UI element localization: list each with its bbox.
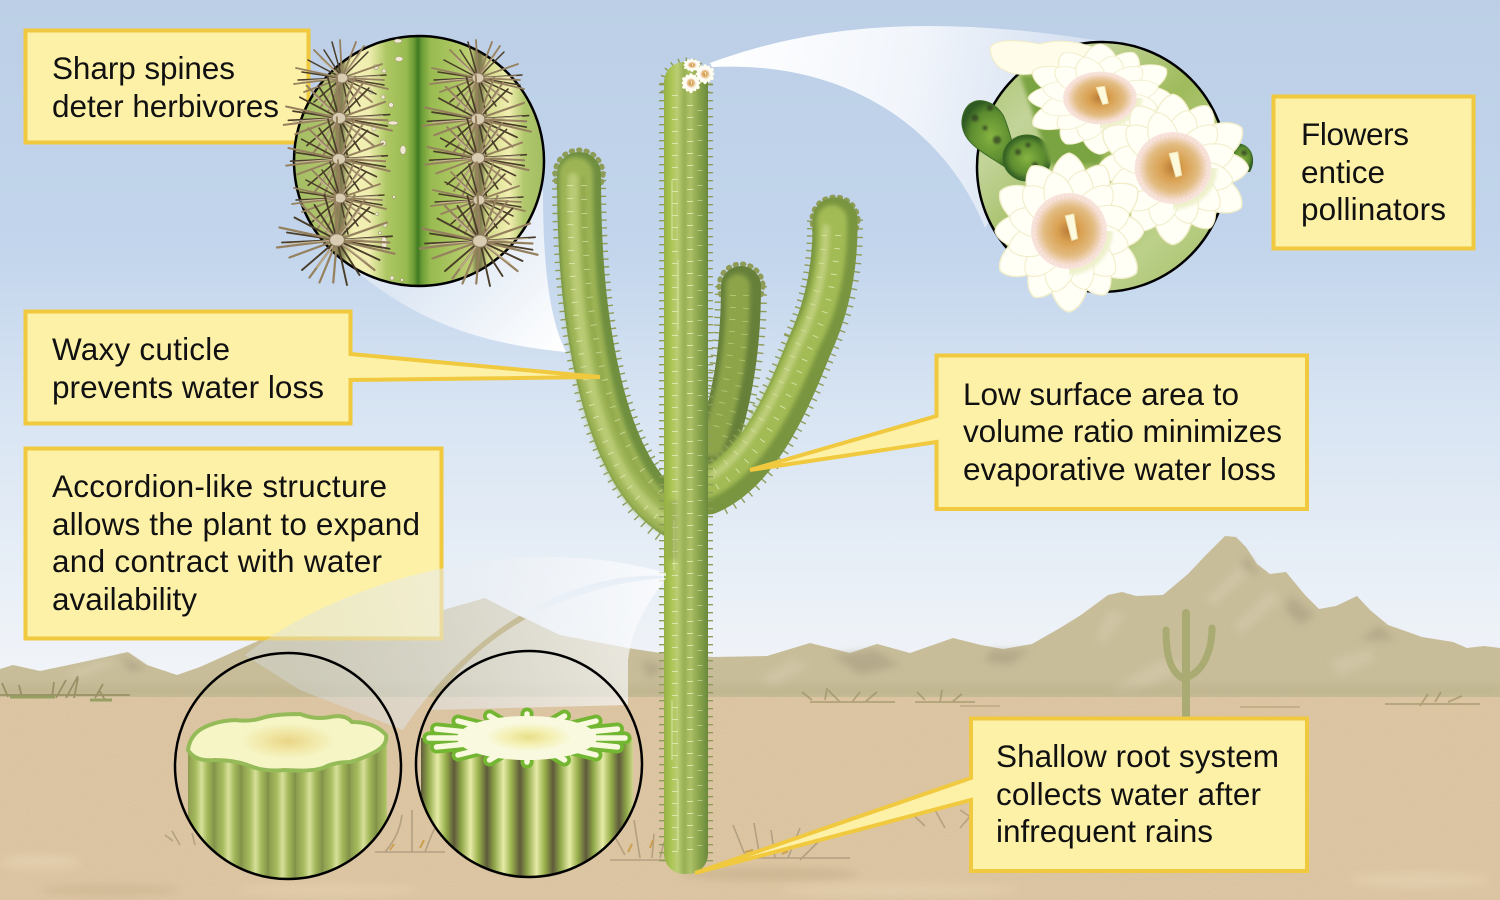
callout beam: contracted section <box>430 578 666 710</box>
distant cactus <box>1166 613 1212 716</box>
mountain shadows and highlights <box>0 555 1500 697</box>
desert ground <box>0 697 1500 900</box>
magnified circle: spines <box>277 36 544 286</box>
top flower <box>1024 44 1176 154</box>
contracted stem fingers <box>429 714 625 762</box>
top-left flower <box>990 41 1103 74</box>
label: shallow root system: infrequent rains <box>996 813 1213 849</box>
callout beam: expanded section <box>245 557 666 730</box>
tiny flowers at top of trunk <box>681 58 715 93</box>
saguaro cactus <box>555 58 858 874</box>
label: low surface area: volume ratio minimizes <box>963 413 1282 449</box>
magnified circle: expanded stem section <box>175 653 401 885</box>
ground light and shadow patches <box>0 855 1490 896</box>
main trunk <box>662 60 710 874</box>
green buds <box>962 75 1253 181</box>
right flower <box>1094 94 1252 245</box>
label: sharp spines: Sharp spines <box>52 50 235 86</box>
label: flowers: pollinators <box>1301 191 1446 227</box>
callout beam: flowers <box>710 26 1130 228</box>
dry scrub along the horizon <box>0 676 1480 707</box>
label: low surface area: Low surface area to <box>963 376 1239 412</box>
right arm <box>708 197 858 492</box>
label: accordion-like structure: availability <box>52 581 197 617</box>
middle arm <box>712 264 763 460</box>
expanded stem top <box>188 714 386 771</box>
label: waxy cuticle <box>26 312 600 424</box>
label: waxy cuticle: prevents water loss <box>52 369 324 405</box>
label: shallow root system <box>695 718 1307 873</box>
label: flowers: entice <box>1301 154 1385 190</box>
bottom flower <box>991 153 1147 312</box>
foreground dry grass tufts <box>165 810 975 860</box>
white wax specks <box>369 39 406 282</box>
magnified circle: flowers <box>962 41 1253 312</box>
magnified circle: contracted stem section <box>416 651 642 883</box>
left arm <box>555 150 674 520</box>
label: flowers <box>1274 96 1474 248</box>
callout beam: spines <box>355 190 566 352</box>
label: accordion-like structure <box>26 448 442 638</box>
label: sharp spines: deter herbivores <box>52 88 279 124</box>
label: accordion-like structure: and contract with water <box>52 543 382 579</box>
label: shallow root system: collects water after <box>996 776 1261 812</box>
right spine clusters <box>420 40 538 286</box>
label: accordion-like structure: allows the plant to expand <box>52 506 420 542</box>
label: waxy cuticle: Waxy cuticle <box>52 331 230 367</box>
label: flowers: Flowers <box>1301 116 1409 152</box>
label: low surface area <box>750 356 1307 509</box>
label: low surface area: evaporative water loss <box>963 451 1276 487</box>
areole groove bands <box>335 40 484 280</box>
label: shallow root system: Shallow root system <box>996 738 1279 774</box>
sky background <box>0 0 1500 700</box>
label: sharp spines <box>26 30 308 142</box>
left spine clusters <box>277 40 394 285</box>
desert mountains <box>0 536 1500 700</box>
label: accordion-like structure: Accordion-like structure <box>52 468 387 504</box>
